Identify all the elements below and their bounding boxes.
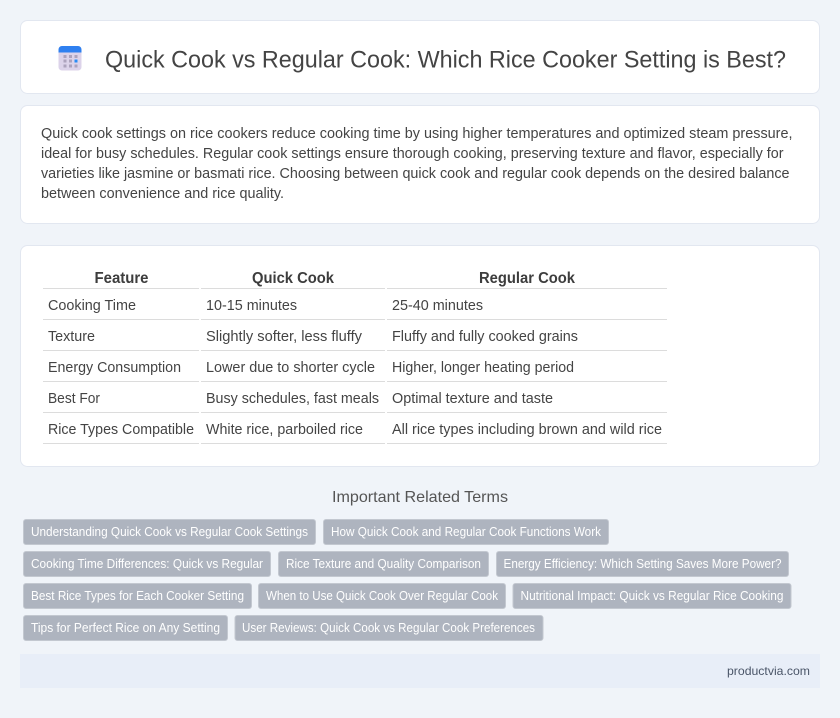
icon: calendar	[58, 46, 82, 70]
title: Quick Cook vs Regular Cook: Which Rice Cooker Setting is Best?	[105, 46, 786, 74]
footer: productvia.com	[727, 664, 810, 678]
tag	[513, 584, 791, 608]
table row: texture: Slightly softer, less fluffy	[206, 329, 363, 345]
table row: texture: Fluffy and fully cooked grains	[392, 329, 578, 345]
table row: energy consumption: Energy Consumption	[48, 360, 181, 376]
panel: comparison table	[20, 246, 820, 466]
tag	[24, 584, 252, 608]
table row: energy consumption: Lower due to shorter cycle	[206, 360, 375, 376]
tag	[324, 520, 608, 544]
tag	[24, 520, 316, 544]
tag: Rice Texture and Quality Comparison	[286, 557, 481, 571]
table header	[94, 270, 575, 287]
table row: rice types compatible: Rice Types Compatible	[48, 422, 194, 438]
tag: Tips for Perfect Rice on Any Setting	[31, 621, 220, 635]
table row: best for: Optimal texture and taste	[392, 391, 553, 407]
table header: Quick Cook	[252, 270, 334, 287]
heading: related terms: Important Related Terms	[332, 489, 508, 506]
tag	[24, 552, 270, 576]
tag: Energy Efficiency: Which Setting Saves More Power?	[504, 557, 782, 571]
tag: Understanding Quick Cook vs Regular Cook Settings	[31, 525, 308, 539]
table row: rice types compatible: White rice, parboiled rice	[206, 422, 363, 438]
tag: When to Use Quick Cook Over Regular Cook	[266, 589, 499, 603]
panel: title card	[20, 20, 820, 94]
table row: best for: Best For	[48, 391, 100, 407]
table row: texture: Texture	[48, 329, 95, 345]
table header: Regular Cook	[479, 270, 575, 287]
table row: energy consumption	[48, 360, 574, 376]
text block: intro paragraph: Quick cook settings on rice cookers reduce cooking time by using higher temperatures and optimized steam pressure,	[41, 126, 792, 142]
tag	[258, 584, 506, 608]
table row: energy consumption: Higher, longer heating period	[392, 360, 574, 376]
text block: intro paragraph	[41, 126, 792, 202]
table row: texture	[48, 329, 578, 345]
text block: intro paragraph: varieties like jasmine or basmati rice. Choosing between quick cook and regular cook depends on the desired balance	[41, 166, 790, 182]
tag: Nutritional Impact: Quick vs Regular Rice Cooking	[520, 589, 784, 603]
tag: Best Rice Types for Each Cooker Setting	[31, 589, 244, 603]
tag	[24, 616, 228, 640]
table row: best for	[48, 391, 553, 407]
table header: Feature	[94, 270, 149, 287]
tag: How Quick Cook and Regular Cook Functions Work	[331, 525, 602, 539]
tag	[278, 552, 488, 576]
table row: cooking time: 10-15 minutes	[206, 298, 297, 314]
table row: rice types compatible: All rice types including brown and wild rice	[392, 422, 662, 438]
panel: intro text	[20, 106, 820, 224]
table row: best for: Busy schedules, fast meals	[206, 391, 379, 407]
table row: cooking time: Cooking Time	[48, 298, 136, 314]
text block: intro paragraph: ideal for busy schedules. Regular cook settings ensure thorough cooking, preserving texture and flavor, especially for	[41, 146, 784, 162]
footer	[20, 654, 820, 688]
tag	[235, 616, 543, 640]
table row: cooking time	[48, 298, 483, 314]
tag: Cooking Time Differences: Quick vs Regular	[31, 557, 263, 571]
tag: User Reviews: Quick Cook vs Regular Cook Preferences	[242, 621, 535, 635]
tag	[496, 552, 788, 576]
tags: related terms	[24, 520, 791, 640]
table row: rice types compatible	[48, 422, 662, 438]
table row: cooking time: 25-40 minutes	[392, 298, 483, 314]
text block: intro paragraph: between convenience and rice quality.	[41, 186, 284, 202]
